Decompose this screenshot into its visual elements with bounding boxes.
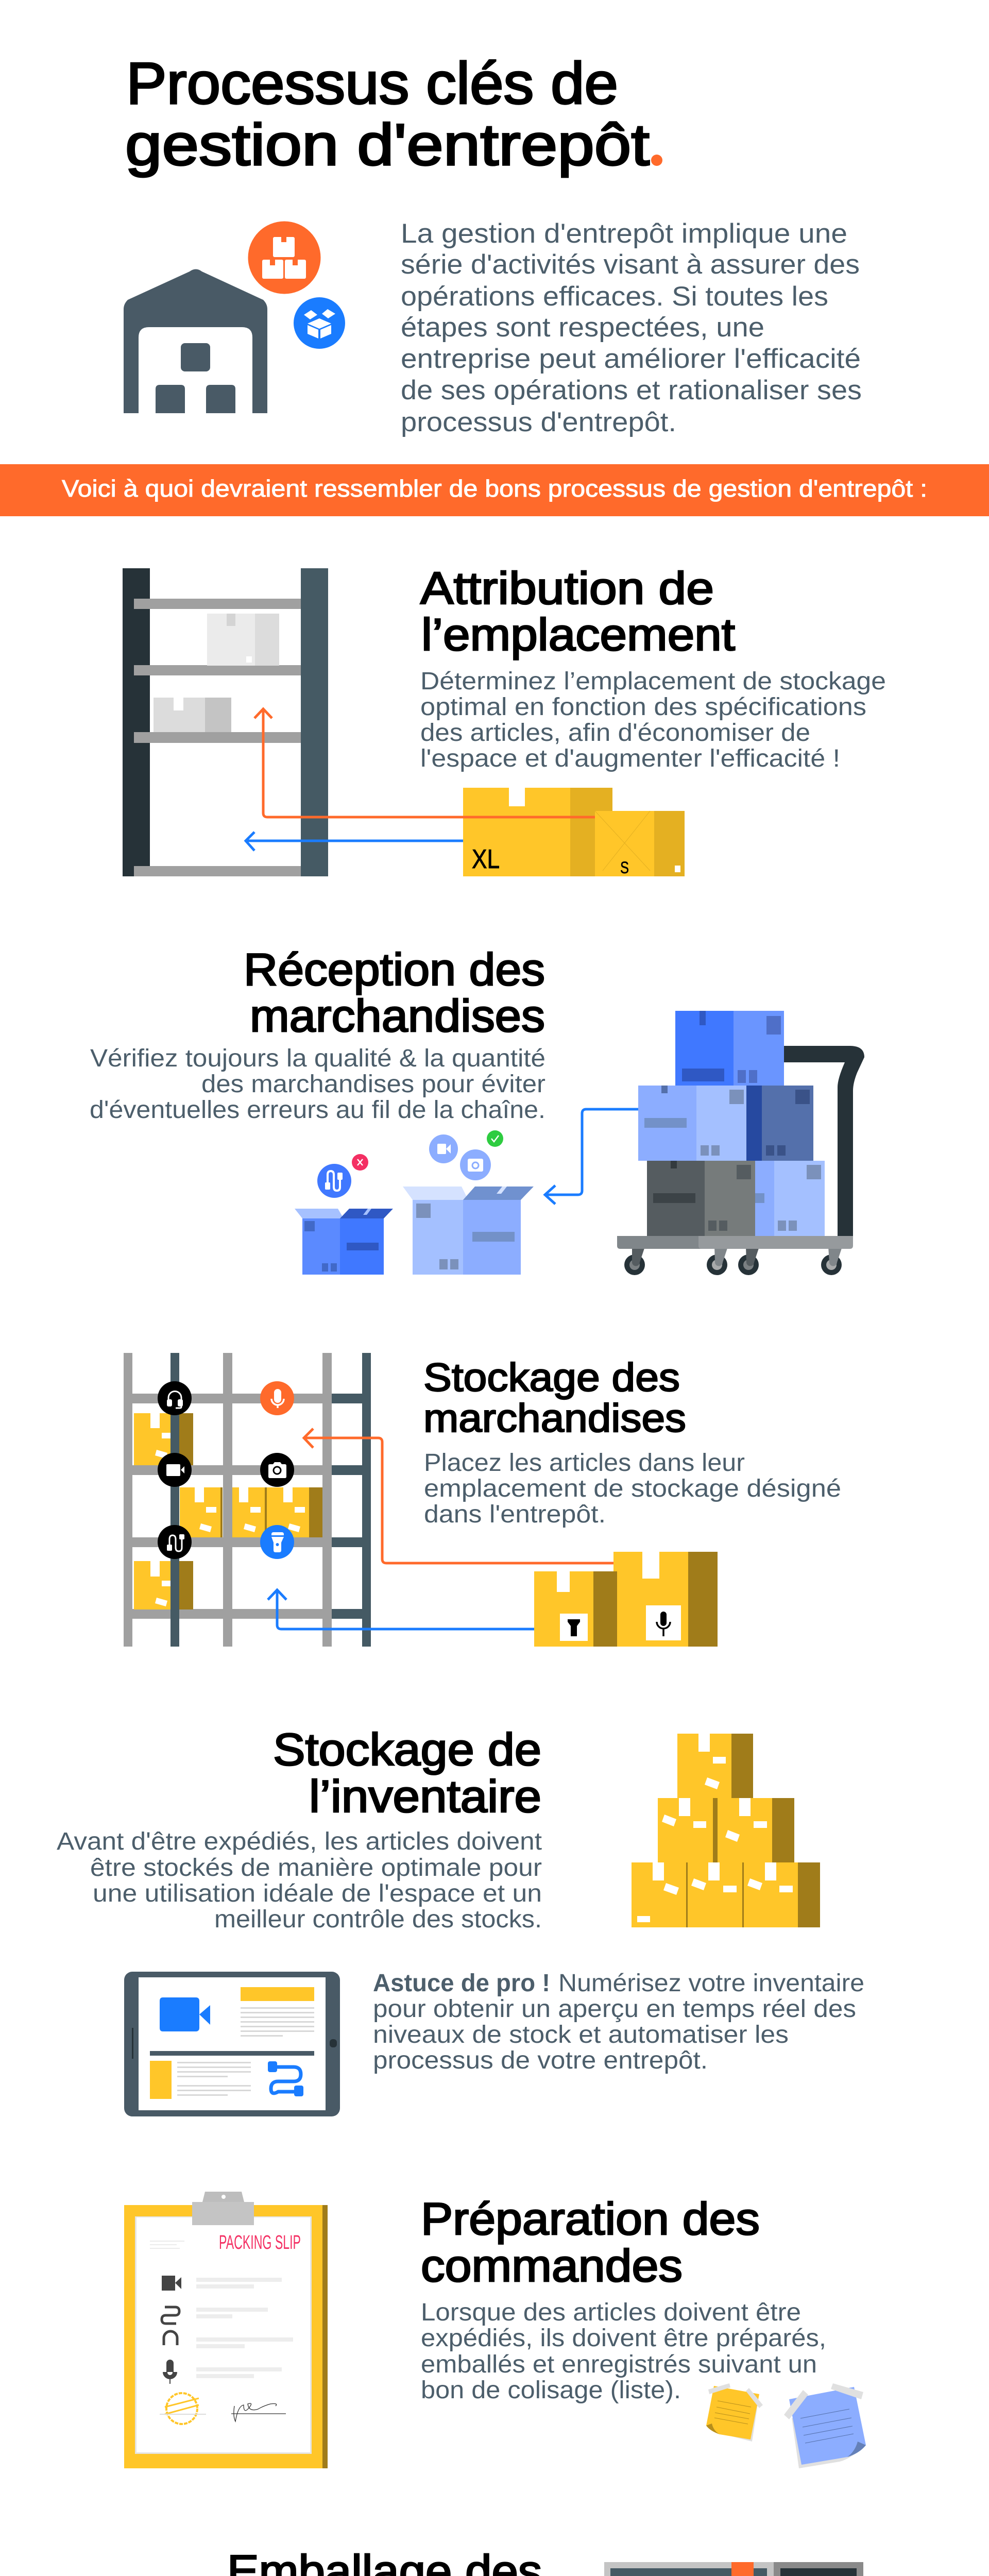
body text: Vérifiez toujours la qualité & la quantité — [90, 1045, 545, 1072]
body text: Lorsque des articles doivent être — [421, 2299, 801, 2326]
heading: marchandises — [250, 990, 545, 1041]
pro tip text: niveaux de stock et automatiser les — [373, 2021, 789, 2048]
body text: une utilisation idéale de l'espace et un — [93, 1880, 542, 1907]
heading: Stockage de — [273, 1724, 541, 1775]
packing cart — [604, 2562, 863, 2576]
pro tip text — [373, 1970, 864, 2074]
panel: emballage des commandes — [86, 2546, 863, 2576]
body text: dans l'entrepôt. — [424, 1501, 606, 1528]
sticky note yellow — [706, 2383, 763, 2442]
heading: Stockage des — [423, 1355, 680, 1400]
body text: Placez les articles dans leur — [424, 1449, 745, 1477]
title: gestion d'entrepôt — [125, 112, 650, 178]
icon: connector badge — [317, 1164, 351, 1198]
intro paragraph: La gestion d'entrepôt implique une — [401, 218, 847, 249]
body text — [421, 2299, 826, 2404]
panel: stockage de l'inventaire — [57, 1724, 864, 2116]
arrow: orange to rack — [304, 1429, 613, 1563]
icon: connector — [162, 2307, 179, 2324]
body text: être stockés de manière optimale pour — [90, 1854, 542, 1882]
icon: approved badge — [487, 1130, 503, 1147]
arrow: orange to upper shelf — [254, 709, 595, 817]
icon: camera badge — [460, 1149, 491, 1180]
icon: headset badge — [158, 1381, 192, 1415]
body text: bon de colisage (liste). — [421, 2377, 681, 2404]
pro tip text: Numérisez votre inventaire — [558, 1970, 864, 1997]
tablet — [124, 1972, 340, 2116]
intro paragraph: série d'activités visant à assurer des — [401, 249, 860, 280]
body text: des marchandises pour éviter — [201, 1071, 545, 1098]
icon: video badge — [429, 1134, 458, 1163]
heading — [423, 1355, 686, 1440]
shelving rack — [124, 1353, 371, 1647]
yellow boxes XL and S: XL — [472, 844, 500, 874]
icon: orange boxes circle — [248, 222, 320, 294]
icon: warehouse — [124, 269, 267, 413]
signature — [231, 2403, 286, 2421]
panel: stockage des marchandises — [124, 1353, 841, 1647]
pro tip text: pour obtenir un aperçu en temps réel des — [373, 1995, 856, 2023]
body text: emballés et enregistrés suivant un — [421, 2351, 817, 2378]
open box large — [403, 1187, 534, 1275]
title — [125, 51, 662, 178]
heading: Réception des — [244, 944, 545, 995]
body text: Déterminez l’emplacement de stockage — [420, 668, 886, 695]
intro paragraph: entreprise peut améliorer l'efficacité — [401, 344, 861, 374]
icon: video badge — [158, 1453, 192, 1487]
panel: réception des marchandises — [90, 944, 864, 1275]
panel: préparation des commandes — [124, 2192, 866, 2468]
pro tip text: processus de votre entrepôt. — [373, 2047, 708, 2074]
body text — [90, 1045, 545, 1124]
intro paragraph: étapes sont respectées, une — [401, 312, 764, 343]
heading — [273, 1724, 541, 1822]
body text: meilleur contrôle des stocks. — [214, 1906, 542, 1933]
icon: rejected badge — [352, 1154, 368, 1171]
stacked boxes — [632, 1734, 820, 1927]
icon: microphone — [163, 2360, 177, 2384]
heading: Préparation des — [421, 2193, 760, 2244]
arrow: blue to rack — [268, 1590, 534, 1629]
yellow boxes XL and S: S — [620, 858, 629, 877]
trolley with blue boxes — [617, 1011, 864, 1275]
icon: microphone badge — [260, 1381, 294, 1415]
heading — [420, 563, 735, 660]
heading: l’emplacement — [421, 609, 735, 660]
heading: l’inventaire — [309, 1771, 541, 1822]
panel: attribution de l'emplacement — [123, 563, 886, 877]
yellow boxes XL and S — [463, 788, 685, 877]
icon: camera badge — [260, 1453, 294, 1487]
heading — [421, 2193, 760, 2291]
stamp — [160, 2393, 206, 2424]
heading — [244, 944, 545, 1041]
body text: optimal en fonction des spécifications — [420, 693, 866, 721]
body text — [424, 1449, 841, 1528]
clipboard with packing slip — [124, 2192, 328, 2468]
icon: video — [162, 2276, 181, 2291]
body text: expédiés, ils doivent être préparés, — [421, 2325, 826, 2352]
body text — [57, 1828, 542, 1933]
body text — [420, 668, 886, 772]
clipboard with packing slip: PACKING SLIP — [219, 2232, 301, 2253]
labelled boxes — [534, 1552, 718, 1647]
placeholder lines — [196, 2278, 293, 2378]
arrow: blue to lower shelf — [246, 832, 463, 851]
pro tip text: Astuce de pro ! — [373, 1970, 550, 1997]
body text: l'espace et d'augmenter l'efficacité ! — [420, 745, 840, 772]
body text: d'éventuelles erreurs au fil de la chaîne. — [90, 1096, 545, 1124]
body text: des articles, afin d'économiser de — [420, 719, 810, 747]
shelf illustration — [123, 568, 328, 876]
icon: flashlight badge — [260, 1525, 294, 1559]
icon: headset — [164, 2331, 177, 2345]
intro paragraph — [401, 218, 862, 437]
heading: commandes — [421, 2240, 683, 2291]
intro paragraph: processus d'entrepôt. — [401, 407, 676, 437]
heading: marchandises — [423, 1396, 686, 1440]
title: Processus clés de — [126, 51, 618, 116]
body text: emplacement de stockage désigné — [424, 1475, 841, 1502]
arrow: blue from trolley to open boxes — [545, 1109, 638, 1204]
sticky note blue — [784, 2383, 866, 2468]
icon: connector badge — [158, 1525, 192, 1559]
intro paragraph: de ses opérations et rationaliser ses — [401, 375, 862, 405]
heading: Attribution de — [420, 563, 714, 614]
open box small — [295, 1209, 393, 1275]
orange banner: Voici à quoi devraient ressembler de bons processus de gestion d'entrepôt : — [62, 475, 927, 502]
body text: Avant d'être expédiés, les articles doivent — [57, 1828, 542, 1855]
icon: blue open box circle — [294, 297, 345, 349]
intro paragraph: opérations efficaces. Si toutes les — [401, 281, 828, 312]
orange banner — [0, 464, 989, 516]
